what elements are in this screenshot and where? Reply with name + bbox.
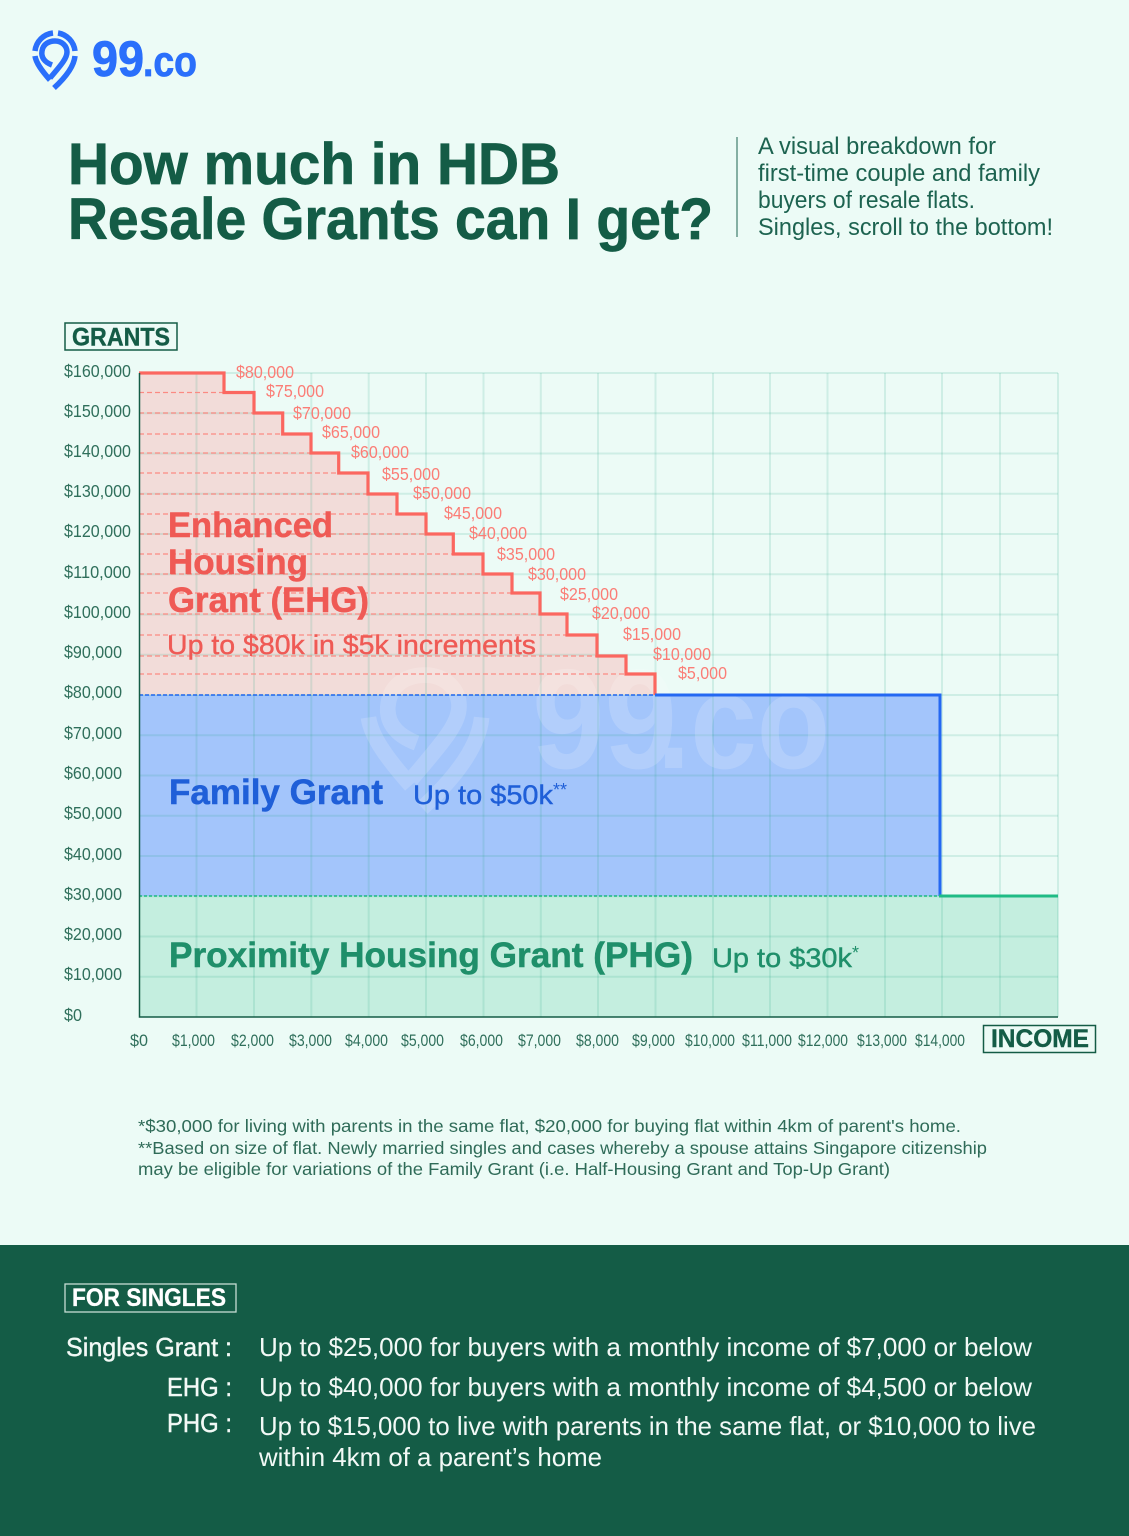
subtitle: buyers of resale flats. [758,187,975,214]
subtitle: Singles, scroll to the bottom! [758,214,1053,241]
watermark: 99.co: 99 [532,640,677,799]
EHG step labels: $50,000 [413,483,471,503]
title: How much in HDB [68,132,560,197]
subtitle [737,133,1053,241]
x axis labels: $3,000 [289,1032,332,1050]
EHG step labels: $70,000 [293,403,351,423]
EHG step labels: $60,000 [351,442,409,462]
y axis labels: $130,000 [64,481,131,501]
x axis labels: $4,000 [345,1032,388,1050]
footnotes: may be eligible for variations of the Family Grant (i.e. Half-Housing Grant and Top-Up Grant) [138,1159,890,1179]
PHG heading: Proximity Housing Grant (PHG) [169,936,693,975]
PHG heading: Up to $30k [712,943,853,973]
title [68,132,713,252]
EHG heading [167,506,536,660]
y axis labels: $10,000 [64,964,122,984]
Family Grant heading: Up to $50k [413,780,554,810]
subtitle: first-time couple and family [758,160,1040,187]
PHG heading: * [852,943,859,963]
EHG step labels: $45,000 [444,503,502,523]
area: Proximity Housing Grant [139,896,1058,1017]
EHG step labels: $75,000 [266,381,324,401]
y axis labels: $60,000 [64,763,122,783]
y axis labels: $0 [64,1005,82,1025]
row: PHG: PHG : [167,1408,232,1438]
y axis labels: $40,000 [64,844,122,864]
EHG step labels: $25,000 [560,584,618,604]
y axis labels: $140,000 [64,441,131,461]
panel: for singles [0,1245,1129,1536]
y axis labels: $50,000 [64,803,122,823]
axis label: grants: GRANTS [72,324,170,352]
EHG step labels: $55,000 [382,464,440,484]
axes [140,373,1058,1017]
EHG step labels: $10,000 [653,644,711,664]
icon: map pin [35,33,75,88]
EHG step labels: $65,000 [322,422,380,442]
EHG heading: Grant (EHG) [168,581,369,620]
logo: 99.co: 99 [92,31,144,87]
row: PHG [167,1408,1036,1472]
y axis labels [64,361,131,1025]
y axis labels: $150,000 [64,401,131,421]
area: Enhanced Housing Grant [139,373,655,695]
y axis labels: $30,000 [64,884,122,904]
watermark: 99.co [368,640,830,808]
watermark: 99.co: .co [657,645,830,797]
logo: 99.co: .co [143,38,197,86]
EHG step labels [236,362,727,683]
Family Grant outline [139,695,940,896]
y axis labels: $90,000 [64,642,122,662]
x axis labels: $8,000 [576,1032,619,1050]
EHG step labels: $5,000 [678,663,727,683]
row: EHG: Up to $40,000 for buyers with a monthly income of $4,500 or below [259,1372,1032,1402]
x axis labels: $12,000 [798,1032,848,1050]
row: singles grant: Up to $25,000 for buyers with a monthly income of $7,000 or below [259,1332,1032,1362]
y axis labels: $120,000 [64,521,131,541]
x axis labels: $7,000 [518,1032,561,1050]
row: PHG: Up to $15,000 to live with parents in the same flat, or $10,000 to live [259,1411,1036,1441]
footnotes: *$30,000 for living with parents in the same flat, $20,000 for buying flat within 4km of parent's home. [138,1116,961,1136]
x axis labels [130,1032,965,1050]
title: Resale Grants can I get? [68,187,713,252]
Family Grant heading: Family Grant [169,773,383,812]
EHG step labels: $20,000 [592,603,650,623]
axis label: income: INCOME [991,1025,1089,1053]
footnotes [138,1116,987,1179]
footnotes: **Based on size of flat. Newly married singles and cases whereby a spouse attains Singapore citizenship [138,1138,987,1158]
x axis labels: $14,000 [915,1032,965,1050]
logo: 99.co [35,31,197,88]
y axis labels: $80,000 [64,682,122,702]
x axis labels: $1,000 [172,1032,215,1050]
EHG step labels: $30,000 [528,564,586,584]
y axis labels: $160,000 [64,361,131,381]
heading: for singles: FOR SINGLES [72,1284,226,1312]
EHG step labels: $15,000 [623,624,681,644]
x axis labels: $0 [130,1032,148,1050]
Proximity Housing Grant outline [139,895,1058,897]
chart: grants by income [64,361,1058,1050]
row: PHG: within 4km of a parent’s home [258,1442,602,1472]
Family Grant heading [169,773,567,812]
x axis labels: $13,000 [857,1032,907,1050]
y axis labels: $20,000 [64,924,122,944]
x axis labels: $11,000 [742,1032,792,1050]
row: EHG: EHG : [167,1372,232,1402]
EHG step labels: $80,000 [236,362,294,382]
EHG step labels: $35,000 [497,544,555,564]
y axis labels: $70,000 [64,723,122,743]
row: singles grant: Singles Grant : [66,1332,232,1362]
EHG heading: Enhanced [168,506,333,545]
EHG heading: Up to $80k in $5k increments [167,630,536,660]
Family Grant heading: ** [553,780,567,800]
area: Family Grant [139,695,940,896]
y axis labels: $110,000 [64,562,131,582]
x axis labels: $2,000 [231,1032,274,1050]
x axis labels: $5,000 [401,1032,444,1050]
x axis labels: $9,000 [632,1032,675,1050]
EHG stepped outline [139,373,655,695]
x axis labels: $6,000 [460,1032,503,1050]
subtitle: A visual breakdown for [758,133,996,160]
EHG step labels: $40,000 [469,523,527,543]
y axis labels: $100,000 [64,602,131,622]
EHG heading: Housing [168,543,308,582]
x axis labels: $10,000 [685,1032,735,1050]
